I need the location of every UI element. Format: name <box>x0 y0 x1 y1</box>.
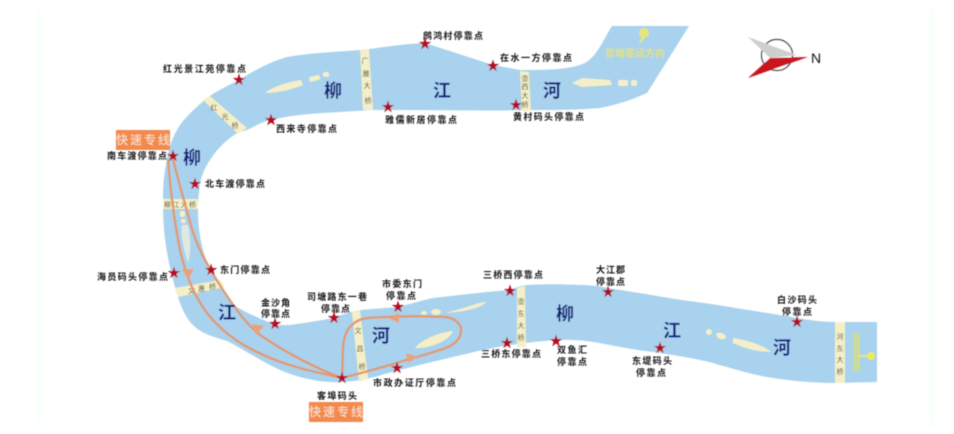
icon: compass: N <box>811 50 821 66</box>
bridge: 壶东大桥: 东 <box>518 309 524 318</box>
big label: 柳江河 lower: 柳 <box>556 304 574 324</box>
bridge: 广雅大桥: 桥 <box>364 96 372 105</box>
stop: 红光景江苑 <box>163 63 246 85</box>
bridge: 河东大桥 <box>835 322 845 383</box>
stop: 客埠码头 <box>317 372 357 401</box>
bridge: 壶东大桥: 桥 <box>518 333 524 342</box>
bridge: 文昌桥: 昌 <box>356 345 364 353</box>
stop: 司塘路东一巷: 司塘路东一巷 <box>307 291 367 302</box>
stop: 大江郡: 停靠点 <box>596 276 625 287</box>
stop: 黄村码头 <box>510 98 584 122</box>
bridge: 文惠桥: 惠 <box>198 284 205 293</box>
bridge: 河东大桥: 东 <box>836 344 844 353</box>
stop: 市委东门: 市委东门 <box>382 278 422 289</box>
stop: 北车渡 <box>189 178 265 189</box>
big label: 柳江河 upper: 柳 <box>324 81 342 101</box>
stop: 市委东门: 停靠点 <box>386 290 416 301</box>
stop: 鹧鸿村 <box>419 30 483 49</box>
bridge: 广雅大桥: 大 <box>364 81 370 90</box>
bridge: 红光桥: 光 <box>222 112 228 121</box>
stop: 东堤码头: 东堤码头 <box>632 355 672 366</box>
bridge: 广雅大桥: 广 <box>362 56 368 65</box>
stop: 东堤码头: 停靠点 <box>636 367 666 378</box>
stop: 三桥东: 三桥东停靠点 <box>481 348 541 359</box>
stop: 市政办证厅: 市政办证厅停靠点 <box>373 377 456 388</box>
stop: 客埠码头: 客埠码头 <box>317 390 357 401</box>
stop: 大江郡 <box>596 264 625 297</box>
bridge: 文惠桥 <box>175 280 225 297</box>
stop: 金沙角 <box>261 297 290 329</box>
stop: 大江郡: 大江郡 <box>596 264 625 275</box>
bridge: 壶西大桥: 桥 <box>522 100 528 109</box>
stop: 鹧鸿村: 鹧鸿村停靠点 <box>423 30 483 41</box>
stop: 市政办证厅 <box>373 362 456 388</box>
bridge: 壶东大桥: 大 <box>518 321 524 330</box>
stop: 北车渡: 北车渡停靠点 <box>205 178 265 189</box>
big label: 柳江河 lower <box>556 304 791 358</box>
stop: 黄村码头: 黄村码头停靠点 <box>513 111 584 122</box>
big label: 河 middle: 河 <box>372 326 390 346</box>
bridge: 河东大桥: 桥 <box>836 367 844 376</box>
arrows on route <box>182 269 418 363</box>
bridge: 柳江大桥 <box>163 199 198 209</box>
stop: 金沙角: 停靠点 <box>261 308 290 319</box>
stop: 金沙角: 金沙角 <box>261 297 290 308</box>
stop: 东门: 东门停靠点 <box>220 264 270 275</box>
stop: 白沙码头: 白沙码头 <box>777 294 817 305</box>
stop: 白沙码头 <box>777 294 817 327</box>
bridge: 壶西大桥: 大 <box>522 91 528 100</box>
bridge: 河东大桥: 河 <box>836 333 844 341</box>
bridge: 壶西大桥: 壶 <box>522 74 528 83</box>
icon: yellow marker north: 官塘客运方向 <box>605 47 665 60</box>
bridge: 广雅大桥: 雅 <box>362 69 370 78</box>
panel: river <box>163 26 877 383</box>
stop: 在水一方 <box>487 52 572 71</box>
stop: 双鱼汇: 停靠点 <box>557 356 587 367</box>
bridge: 柳江大桥: 柳江大桥 <box>164 200 196 209</box>
stop: 三桥东 <box>481 336 541 359</box>
stop: 司塘路东一巷: 停靠点 <box>321 303 350 314</box>
stop: 市委东门 <box>382 278 422 312</box>
bridge: 壶东大桥: 壶 <box>518 297 524 306</box>
callout: 快速专线 north: 快速专线 <box>116 132 170 147</box>
stop: 雅儒新居 <box>382 100 457 125</box>
big label: 柳江河 lower: 河 <box>773 338 791 358</box>
callout: 快速专线 south: 快速专线 <box>309 404 363 419</box>
icon: yellow marker south <box>853 333 875 371</box>
route: fast line <box>168 159 461 378</box>
icon: yellow marker north <box>605 28 665 60</box>
stop: 双鱼汇: 双鱼汇 <box>557 344 587 355</box>
stop: 三桥西 <box>483 269 543 296</box>
big label: 柳江河 upper: 河 <box>543 81 561 101</box>
big label: 柳江河 upper <box>324 81 561 101</box>
islands <box>180 72 771 352</box>
big label: 柳 west: 柳 <box>183 148 201 168</box>
bridge: 红光桥 <box>203 96 247 134</box>
bridge: 文昌桥 <box>352 310 368 382</box>
bridge: 文昌桥: 文 <box>354 326 362 335</box>
bridge: 文惠桥: 桥 <box>209 282 216 291</box>
stop: 三桥西: 三桥西停靠点 <box>483 269 543 280</box>
stop: 在水一方: 在水一方停靠点 <box>500 52 572 63</box>
bridge: 壶东大桥 <box>517 286 526 347</box>
stop: 海员码头: 海员码头停靠点 <box>97 271 168 282</box>
stop: 司塘路东一巷 <box>307 291 367 323</box>
bridge: 广雅大桥 <box>360 49 373 110</box>
bridge: 壶西大桥 <box>520 71 531 111</box>
bridge: 文惠桥: 文 <box>188 286 195 295</box>
bridge: 红光桥: 红 <box>210 103 218 112</box>
stop: 双鱼汇 <box>550 334 587 367</box>
bridge: 河东大桥: 大 <box>836 355 844 364</box>
stop: 南车渡: 南车渡停靠点 <box>107 150 167 161</box>
stop: 红光景江苑: 红光景江苑停靠点 <box>163 63 246 74</box>
stop: 西来寺 <box>265 114 337 134</box>
big label: 柳江河 upper: 江 <box>433 81 451 101</box>
big label: 柳江河 lower: 江 <box>663 321 681 341</box>
stop: 雅儒新居: 雅儒新居停靠点 <box>385 114 457 125</box>
stop: 海员码头 <box>97 266 180 282</box>
stop: 西来寺: 西来寺停靠点 <box>276 123 337 134</box>
stop: 白沙码头: 停靠点 <box>782 306 812 317</box>
stop: 东门 <box>205 264 270 275</box>
bridge: 文昌桥: 桥 <box>358 362 366 371</box>
stop: 东堤码头 <box>632 342 672 378</box>
bridge: 红光桥: 桥 <box>232 121 238 130</box>
bridge: 壶西大桥: 西 <box>522 83 528 91</box>
big label: 江 west: 江 <box>218 303 236 323</box>
icon: compass <box>748 37 821 78</box>
